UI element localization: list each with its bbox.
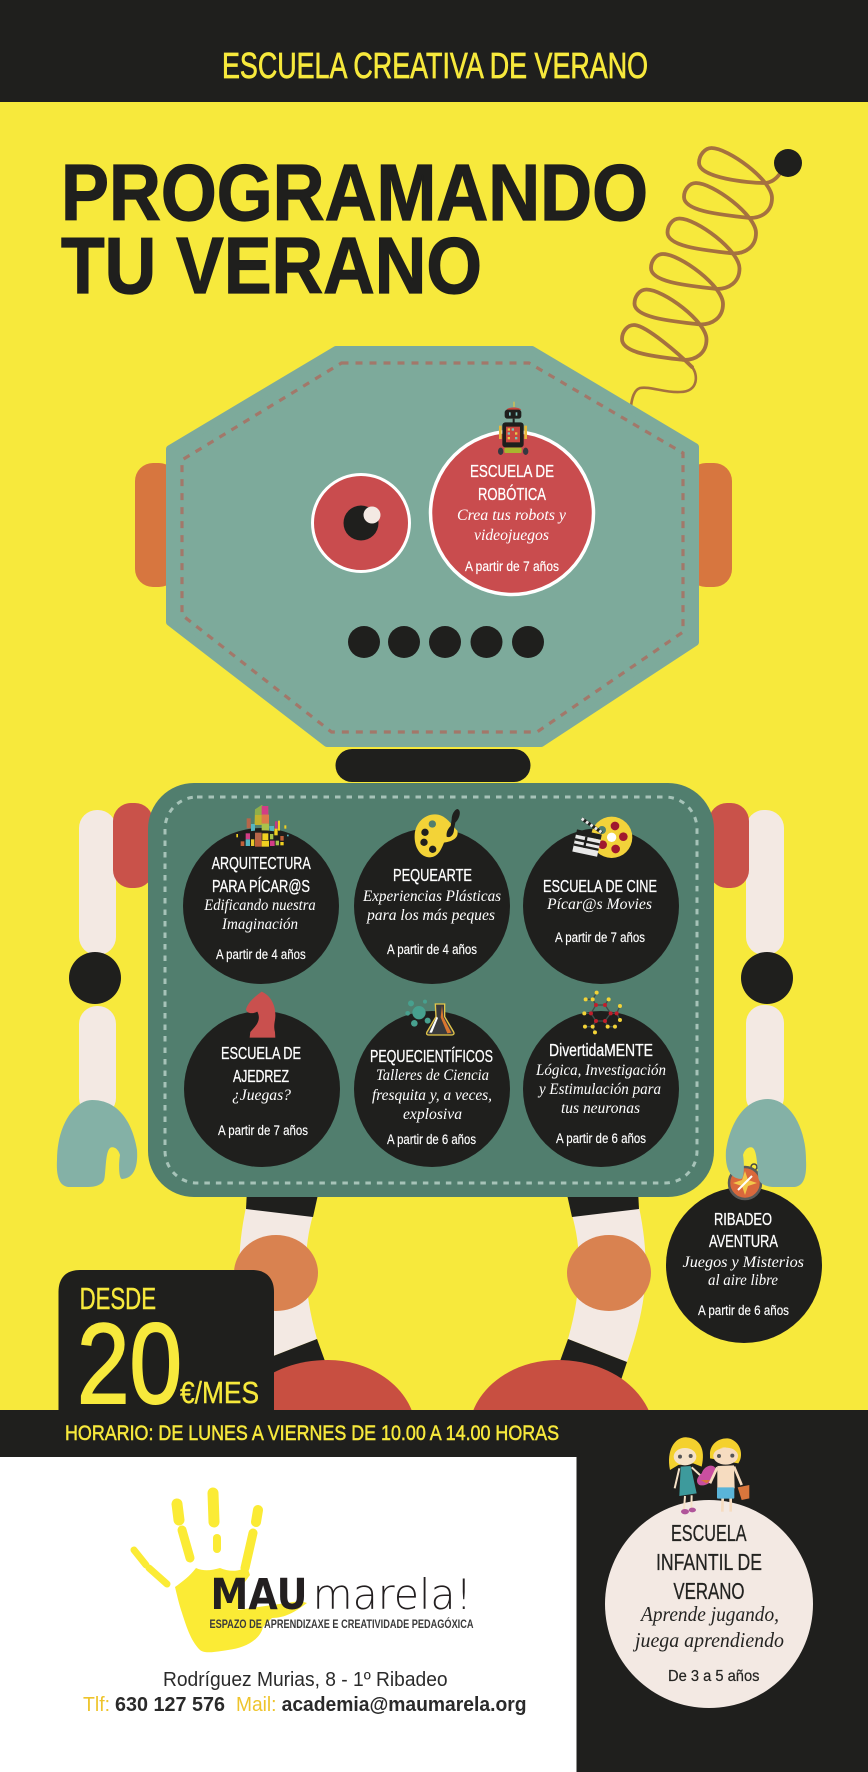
panel: escuela de robotica (430, 432, 594, 594)
price box: DESDE (80, 1281, 156, 1316)
icon: two children (669, 1437, 749, 1514)
panel: escuela de ajedrez (184, 1011, 340, 1167)
logo: wordmark: marela! (313, 1570, 472, 1619)
panel: pequecientificos: A partir de 6 años (387, 1132, 476, 1147)
panel: pequearte: PEQUEARTE (393, 865, 472, 885)
icon: small robot (498, 402, 528, 455)
panel: escuela infantil de verano (605, 1500, 813, 1708)
panel: escuela infantil de verano: De 3 a 5 años (668, 1668, 760, 1685)
panel: pequecientificos: Talleres de Ciencia (376, 1067, 489, 1084)
panel: ribadeo aventura: AVENTURA (709, 1231, 778, 1251)
panel: arquitectura: ARQUITECTURA (212, 853, 311, 873)
left eye (312, 474, 410, 572)
icon: flask and splash (405, 1000, 454, 1035)
icon: clapperboard and film reel (572, 817, 632, 858)
panel: escuela de robotica: videojuegos (474, 527, 549, 544)
panel: escuela de cine: ESCUELA DE CINE (543, 876, 657, 896)
price box (58, 1270, 274, 1428)
logo: wordmark: ESPAZO DE APRENDIZAXE E CREATIVIDADE PEDAGÓXICA (210, 1618, 474, 1631)
panel: ribadeo aventura: RIBADEO (714, 1209, 772, 1229)
right arm (709, 803, 793, 1115)
bottom band with schedule (0, 1410, 868, 1772)
panel: escuela de cine: A partir de 7 años (555, 930, 645, 945)
price box: 20 (77, 1301, 182, 1428)
left arm (57, 803, 153, 1187)
panel: escuela de robotica: A partir de 7 años (465, 559, 559, 574)
robot mouth (348, 626, 544, 658)
contact details: 630 127 576 (115, 1694, 225, 1716)
title: TU VERANO (61, 221, 482, 310)
left ear (135, 463, 177, 587)
panel: pequearte: Experiencias Plásticas (362, 888, 501, 905)
contact details: Mail: (236, 1694, 276, 1716)
robot head (170, 350, 695, 743)
panel: pequecientificos: PEQUECIENTÍFICOS (370, 1046, 493, 1066)
logo: yellow hand print (134, 1493, 307, 1652)
panel: divertidamente (523, 1011, 679, 1167)
robot body panel (148, 783, 714, 1197)
panel: ribadeo aventura (666, 1187, 822, 1343)
panel: divertidamente: tus neuronas (561, 1100, 640, 1117)
panel: escuela infantil de verano: INFANTIL DE (656, 1549, 762, 1575)
panel: pequecientificos (354, 1011, 510, 1167)
panel: divertidamente: y Estimulación para (537, 1081, 661, 1098)
left leg (234, 1190, 412, 1411)
panel: ribadeo aventura: al aire libre (708, 1272, 778, 1289)
panel: escuela infantil de verano: ESCUELA (671, 1520, 747, 1546)
panel: ribadeo aventura: Juegos y Misterios (682, 1254, 804, 1271)
panel: escuela de robotica: ESCUELA DE (470, 461, 554, 481)
contact details (83, 1669, 526, 1716)
panel: divertidamente: A partir de 6 años (556, 1131, 646, 1146)
panel: escuela infantil de verano: Aprende jugando, (639, 1602, 779, 1626)
panel: ribadeo aventura: A partir de 6 años (698, 1303, 789, 1318)
antenna spring (622, 148, 802, 406)
panel: escuela de robotica: ROBÓTICA (478, 483, 546, 504)
panel: divertidamente: DivertidaMENTE (549, 1040, 653, 1060)
panel: arquitectura: PARA PÍCAR@S (212, 876, 310, 896)
panel: pequecientificos: fresquita y, a veces, (372, 1087, 492, 1104)
top header band: ESCUELA CREATIVA DE VERANO (222, 45, 648, 86)
icon: molecule (582, 991, 622, 1034)
contact details: academia@maumarela.org (282, 1694, 526, 1716)
panel: escuela de ajedrez: A partir de 7 años (218, 1123, 308, 1138)
panel: arquitectura: Edificando nuestra (203, 897, 316, 914)
panel: pequecientificos: explosiva (403, 1106, 462, 1123)
panel: pequearte (354, 828, 510, 984)
title: PROGRAMANDO (61, 148, 648, 237)
panel: arquitectura: Imaginación (221, 916, 298, 933)
panel: escuela de cine: Pícar@s Movies (546, 896, 652, 913)
icon: compass (729, 1164, 761, 1199)
panel: arquitectura: A partir de 4 años (216, 947, 306, 962)
icon: paint palette (415, 809, 460, 857)
title (61, 148, 648, 310)
icon: chess knight (246, 992, 275, 1038)
panel: escuela de ajedrez: AJEDREZ (233, 1066, 289, 1086)
top header band (0, 0, 868, 102)
panel: escuela de ajedrez: ESCUELA DE (221, 1043, 301, 1063)
bottom band with schedule: HORARIO: DE LUNES A VIERNES DE 10.00 A 14.00 HORAS (65, 1422, 559, 1445)
panel: arquitectura (183, 828, 339, 984)
logo: wordmark (210, 1570, 474, 1631)
panel: escuela de robotica: Crea tus robots y (457, 507, 567, 524)
panel: pequearte: para los más peques (366, 907, 495, 924)
price box: €/MES (180, 1375, 259, 1410)
panel: divertidamente: Lógica, Investigación (535, 1062, 666, 1079)
panel: escuela infantil de verano: VERANO (673, 1578, 744, 1604)
icon: colourful building (236, 805, 289, 847)
logo: wordmark: MAU (210, 1570, 308, 1620)
white contact panel (0, 1457, 576, 1772)
panel: escuela de cine (523, 828, 679, 984)
panel: pequearte: A partir de 4 años (387, 942, 477, 957)
right ear (688, 463, 732, 587)
panel: escuela infantil de verano: juega aprendiendo (632, 1628, 784, 1652)
robot neck (336, 749, 530, 782)
contact details: Tlf: (83, 1694, 110, 1716)
panel: escuela de ajedrez: ¿Juegas? (232, 1087, 291, 1104)
contact details: Rodríguez Murias, 8 - 1º Ribadeo (163, 1669, 448, 1691)
right leg (473, 1190, 651, 1411)
right hand (726, 1099, 806, 1187)
